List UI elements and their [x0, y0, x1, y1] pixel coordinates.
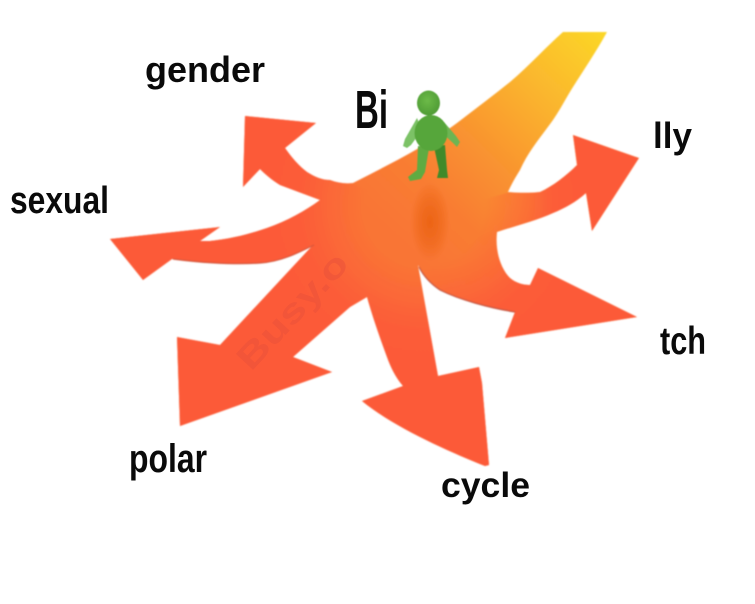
- right arm: [440, 122, 460, 147]
- label: Bi: Bi: [355, 80, 388, 140]
- label: sexual: sexual: [10, 180, 109, 222]
- shadow edge: sexual arrow: [173, 245, 314, 264]
- label: lly: lly: [653, 115, 692, 156]
- label: polar: polar: [129, 437, 207, 481]
- body: [414, 115, 448, 151]
- label: gender: gender: [145, 49, 265, 90]
- road with six arrows: [110, 32, 639, 466]
- label: cycle: cycle: [441, 466, 530, 505]
- infographic: road splitting into arrows: [11, 30, 704, 504]
- icon: green figure walking: [403, 90, 460, 181]
- label: tch: tch: [660, 320, 706, 363]
- head: [417, 90, 440, 116]
- left leg: [408, 146, 429, 181]
- red arrow heads overlay: [110, 116, 640, 466]
- left arm: [403, 118, 422, 148]
- shadow edge: tch arrow: [419, 267, 515, 312]
- reflection under figure: [410, 182, 450, 262]
- right leg: [434, 145, 448, 178]
- watermark: Busy.o: [229, 245, 356, 377]
